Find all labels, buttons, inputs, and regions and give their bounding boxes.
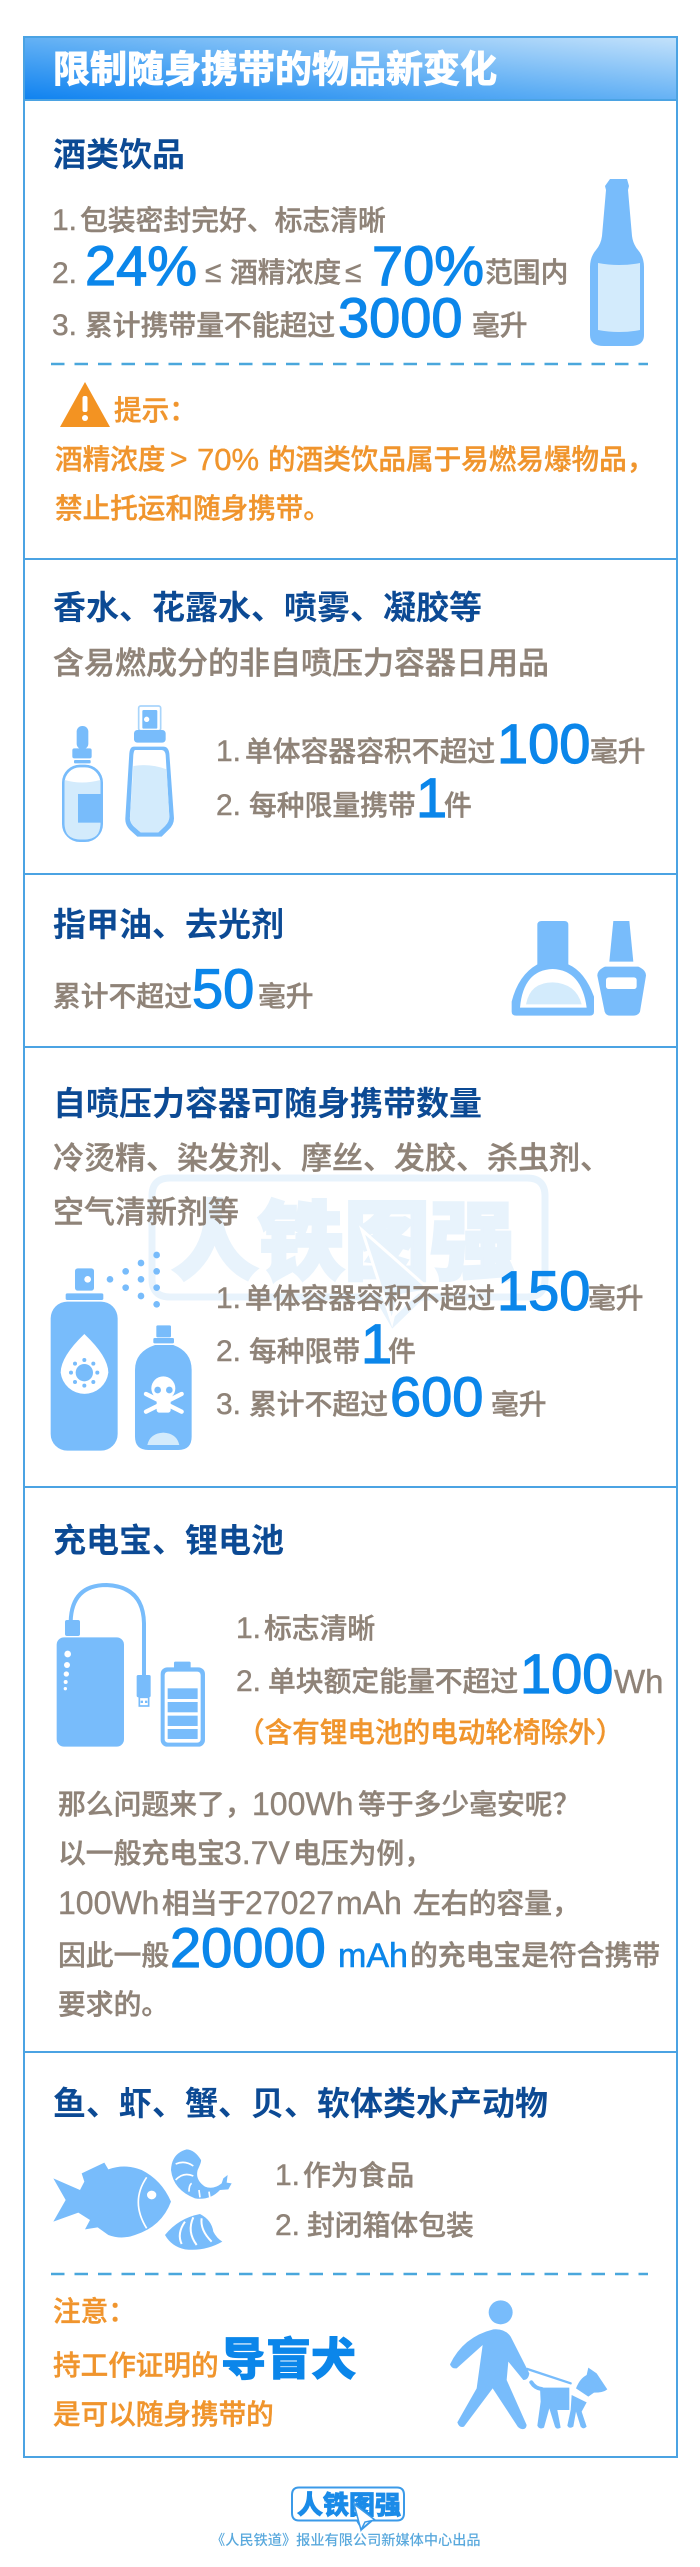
- icon: insecticide bottle: [135, 1325, 192, 1450]
- rule 2: 100: [520, 1642, 613, 1705]
- divider: [24, 873, 677, 875]
- explanation paragraph: 100Wh: [252, 1786, 353, 1822]
- panel: alcohol: [51, 136, 654, 524]
- rule 1: 1.: [236, 1612, 261, 1645]
- heading: aquatic: 鱼、虾、蟹、贝、软体类水产动物: [53, 2085, 548, 2122]
- explanation paragraph: 电压为例，: [293, 1838, 432, 1869]
- icon: dropper bottle: [63, 726, 102, 841]
- heading: aerosol: 自喷压力容器可随身携带数量: [53, 1085, 482, 1122]
- icon: spray can: [51, 1268, 118, 1451]
- note ending: 是可以随身携带的: [53, 2399, 274, 2430]
- explanation paragraph: 20000: [170, 1916, 326, 1979]
- callout text: 的酒类饮品属于易燃易爆物品，: [268, 444, 654, 475]
- subheading: aerosol: 空气清新剂等: [53, 1195, 239, 1230]
- explanation paragraph: mAh: [336, 1885, 402, 1921]
- exception note: （含有锂电池的电动轮椅除外）: [237, 1717, 623, 1748]
- callout text: 禁止托运和随身携带。: [55, 493, 331, 524]
- rule 2: 1: [416, 766, 447, 829]
- rule 3: 累计不超过: [249, 1389, 388, 1420]
- rule 2: 件: [388, 1336, 416, 1367]
- heading: alcohol: 酒类饮品: [53, 136, 185, 173]
- icon: power bank: [57, 1585, 151, 1747]
- rule 3: 累计携带量不能超过: [85, 310, 335, 341]
- explanation paragraph: 左右的容量，: [413, 1888, 580, 1919]
- note line: 导盲犬: [221, 2334, 356, 2385]
- rule 2: 2.: [216, 789, 241, 822]
- explanation paragraph: 那么问题来了，: [58, 1789, 253, 1820]
- dashed divider: [51, 2273, 648, 2275]
- subheading: aerosol: 冷烫精、染发剂、摩丝、发胶、杀虫剂、: [53, 1141, 611, 1176]
- explanation paragraph: 相当于: [162, 1888, 245, 1919]
- note label: 注意：: [53, 2296, 136, 2327]
- credit line: 《人民铁道》报业有限公司新媒体中心出品: [211, 2532, 481, 2549]
- divider: [24, 1486, 677, 1488]
- logo: 人铁图强: [297, 2490, 401, 2520]
- rule 2: 70%: [372, 234, 484, 297]
- explanation paragraph: 3.7V: [224, 1835, 290, 1871]
- watermark: [152, 1178, 545, 1323]
- icon: bottle: [590, 179, 644, 346]
- icon: battery: [161, 1662, 205, 1747]
- note line: 持工作证明的: [53, 2350, 219, 2381]
- icon: person with guide dog: [450, 2300, 607, 2429]
- rule 3: 3000: [338, 286, 463, 349]
- rule: 毫升: [258, 981, 314, 1012]
- callout text: 70%: [197, 442, 259, 477]
- rule 2: 2.: [52, 257, 77, 290]
- panel: power bank: [53, 1522, 664, 2020]
- dashed divider: [51, 363, 648, 365]
- rule 2: 2.: [275, 2209, 300, 2242]
- rule 2: 范围内: [485, 257, 568, 288]
- subheading: perfume: 含易燃成分的非自喷压力容器日用品: [53, 646, 549, 681]
- icon: shrimp: [171, 2149, 232, 2199]
- icon: warning: [60, 382, 110, 427]
- icon: large bottle: [512, 921, 594, 1016]
- rule 1: 1.: [216, 1282, 241, 1315]
- rule 1: 毫升: [590, 736, 646, 767]
- panel: perfume: [53, 589, 646, 841]
- rule 2: Wh: [614, 1663, 664, 1700]
- rule 2: ≤: [205, 256, 221, 289]
- rule 2: 单块额定能量不超过: [268, 1666, 518, 1697]
- explanation paragraph: 因此一般: [58, 1940, 169, 1971]
- rule 1: 100: [497, 712, 590, 775]
- rule 1: 单体容器容积不超过: [245, 736, 495, 767]
- icon: fish: [53, 2163, 171, 2237]
- rule 1: 单体容器容积不超过: [245, 1283, 495, 1314]
- divider: [24, 558, 677, 560]
- rule 2: 1: [361, 1312, 392, 1375]
- heading: power bank: 充电宝、锂电池: [53, 1522, 284, 1559]
- explanation paragraph: 要求的。: [58, 1989, 169, 2020]
- divider: [24, 2051, 677, 2053]
- icon: shell: [165, 2214, 222, 2250]
- panel: nail polish: [53, 906, 646, 1020]
- rule 3: 毫升: [472, 310, 528, 341]
- explanation paragraph: 27027: [245, 1885, 334, 1921]
- rule 1: 1.: [52, 204, 77, 237]
- callout label: 提示：: [114, 395, 197, 426]
- callout text: >: [170, 443, 188, 476]
- logo: [292, 2488, 404, 2530]
- rule 3: 3.: [52, 309, 77, 342]
- rule 1: 包装密封完好、标志清晰: [80, 205, 386, 236]
- title: 限制随身携带的物品新变化: [53, 49, 497, 90]
- rule: 50: [192, 957, 254, 1020]
- rule 3: 600: [390, 1365, 483, 1428]
- rule 2: 封闭箱体包装: [307, 2210, 474, 2241]
- callout text: 酒精浓度: [55, 444, 165, 475]
- explanation paragraph: 等于多少毫安呢？: [358, 1789, 580, 1820]
- panel: aquatic animals: [51, 2085, 648, 2430]
- heading: perfume: 香水、花露水、喷雾、凝胶等: [53, 589, 482, 626]
- rule 3: 3.: [216, 1388, 241, 1421]
- rule: 累计不超过: [53, 981, 192, 1012]
- rule 1: 1.: [216, 735, 241, 768]
- rule 2: 2.: [236, 1665, 261, 1698]
- watermark: 人铁图强: [172, 1195, 516, 1291]
- heading: nail polish: 指甲油、去光剂: [53, 906, 284, 943]
- rule 3: 毫升: [491, 1389, 547, 1420]
- rule 1: 作为食品: [303, 2160, 414, 2191]
- icon: small bottle: [597, 921, 646, 1016]
- rule 2: 酒精浓度: [230, 257, 341, 288]
- rule 2: 每种限带: [249, 1336, 360, 1367]
- rule 2: 每种限量携带: [249, 790, 416, 821]
- panel: aerosol: [51, 1085, 644, 1451]
- rule 1: 1.: [275, 2159, 300, 2192]
- icon: spray bottle: [125, 706, 174, 837]
- rule 2: ≤: [345, 256, 361, 289]
- rule 2: 24%: [85, 234, 197, 297]
- rule 1: 毫升: [588, 1283, 644, 1314]
- icon: spray mist: [107, 1252, 160, 1308]
- rule 2: 件: [444, 790, 472, 821]
- explanation paragraph: 的充电宝是符合携带: [410, 1940, 660, 1971]
- rule 2: 2.: [216, 1335, 241, 1368]
- explanation paragraph: mAh: [338, 1937, 408, 1975]
- divider: [24, 1046, 677, 1048]
- explanation paragraph: 以一般充电宝: [58, 1838, 225, 1869]
- rule 1: 标志清晰: [264, 1613, 375, 1644]
- header bar: [24, 37, 677, 100]
- explanation paragraph: 100Wh: [58, 1885, 159, 1921]
- rule 1: 150: [497, 1259, 590, 1322]
